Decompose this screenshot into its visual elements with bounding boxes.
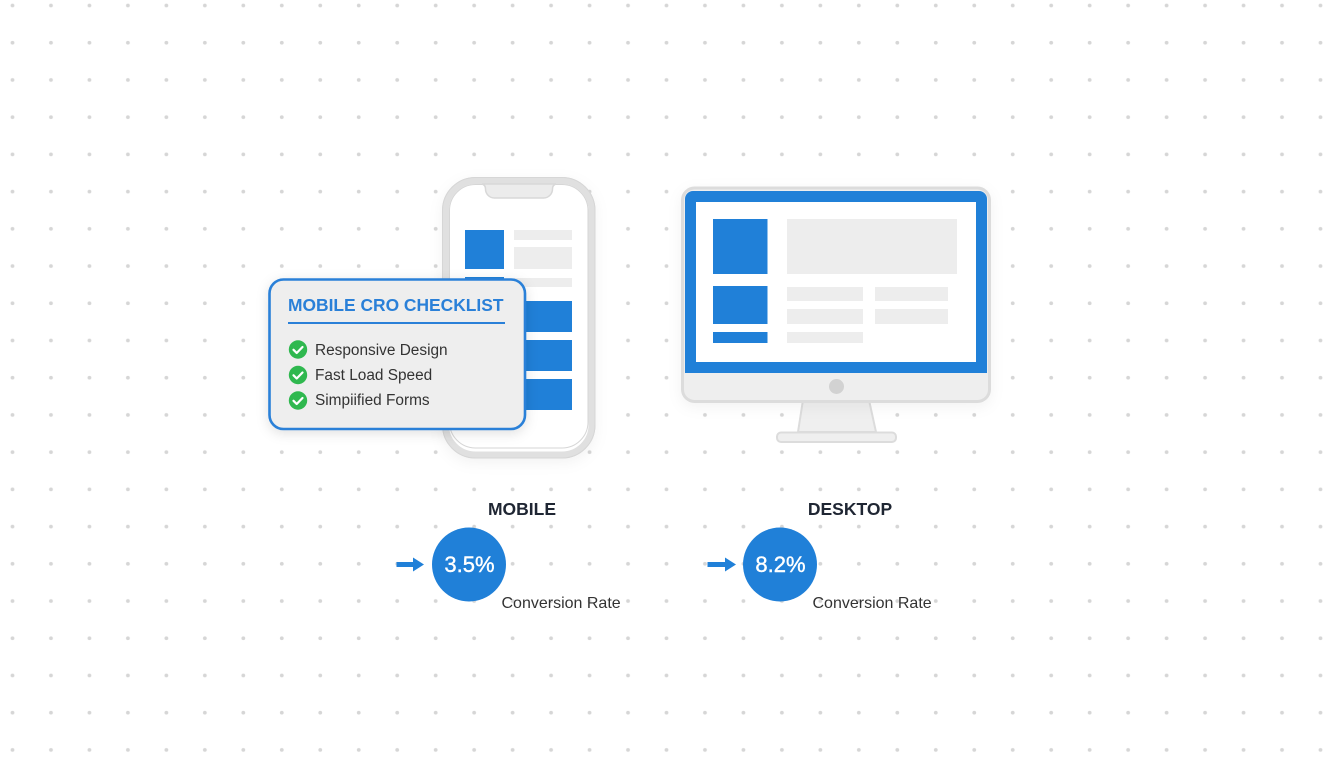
metric: mobile conversion rate — [396, 499, 621, 612]
circle: 8.2% — [743, 528, 817, 602]
label: conversion rate: Conversion Rate — [812, 595, 932, 612]
phone notch — [482, 184, 556, 198]
heading: mobile: MOBILE — [488, 499, 556, 519]
checklist item: responsive design: Responsive Design — [315, 342, 448, 359]
icon: desktop monitor — [682, 188, 990, 442]
monitor screen content — [713, 219, 957, 343]
circle: 3.5%: 3.5% — [444, 552, 495, 577]
monitor stand — [798, 400, 876, 432]
monitor body — [682, 188, 990, 402]
panel: mobile CRO checklist — [270, 280, 525, 429]
checklist item: fast load speed: Fast Load Speed — [315, 367, 432, 384]
checklist item: simplified forms: Simpiified Forms — [315, 392, 430, 409]
heading: desktop: DESKTOP — [808, 499, 892, 519]
circle: 3.5% — [432, 528, 506, 602]
arrow: desktop — [708, 558, 736, 572]
monitor power button — [829, 379, 844, 394]
checklist heading: MOBILE CRO CHECKLIST — [288, 295, 504, 315]
circle: 8.2%: 8.2% — [755, 552, 806, 577]
phone screen content — [465, 230, 572, 410]
arrow: mobile — [396, 558, 424, 572]
icon: smartphone — [442, 178, 595, 458]
label: conversion rate: Conversion Rate — [502, 595, 621, 612]
metric: desktop conversion rate — [708, 499, 932, 612]
